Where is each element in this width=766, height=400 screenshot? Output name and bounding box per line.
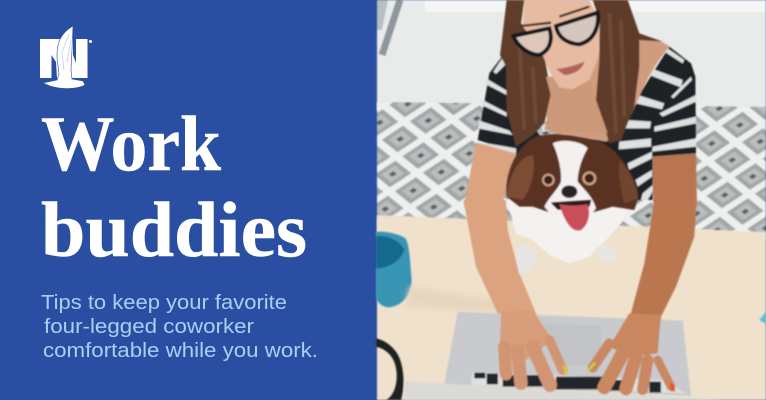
panel: photo of woman with dog at laptop [376,0,766,400]
woman's face [523,0,600,89]
laptop screen back [404,382,719,400]
glasses [513,13,598,55]
small teal note [759,312,766,324]
woman's hair [500,0,551,147]
floor [377,0,766,110]
heading: buddies: buddies [41,186,307,273]
desk shadow [406,287,503,313]
woman's right forearm [626,200,697,337]
panel: blue title panel [0,0,377,400]
woman's neck [544,77,608,133]
dog's mouth and tongue [551,200,591,230]
desk [377,215,766,400]
woman's right upper arm [653,153,697,203]
lips [556,62,584,75]
woman's chest [543,33,669,142]
woman's right hand [587,313,675,391]
laptop [404,312,719,400]
dog's eyes [542,171,596,186]
coffee mug [376,232,412,307]
icon: eagle and N logo [40,26,92,88]
woman's shirt [476,47,696,200]
lower figure [376,200,766,400]
upper figure [464,0,697,203]
heading: Work: Work [41,100,222,187]
rug [377,102,766,240]
dog's head [506,134,639,217]
text block: tagline: four-legged coworker [44,316,254,338]
dog's nose [561,185,577,198]
woman's left hand [499,310,568,385]
text block: tagline: comfortable while you work. [43,340,318,362]
woman's left forearm [463,200,544,333]
dog body and paws [507,200,636,274]
text block: tagline: Tips to keep your favorite [41,292,287,314]
keyboard [471,372,686,393]
headphones [376,338,404,400]
woman's left upper arm [464,143,516,203]
text block: tagline [41,292,318,362]
